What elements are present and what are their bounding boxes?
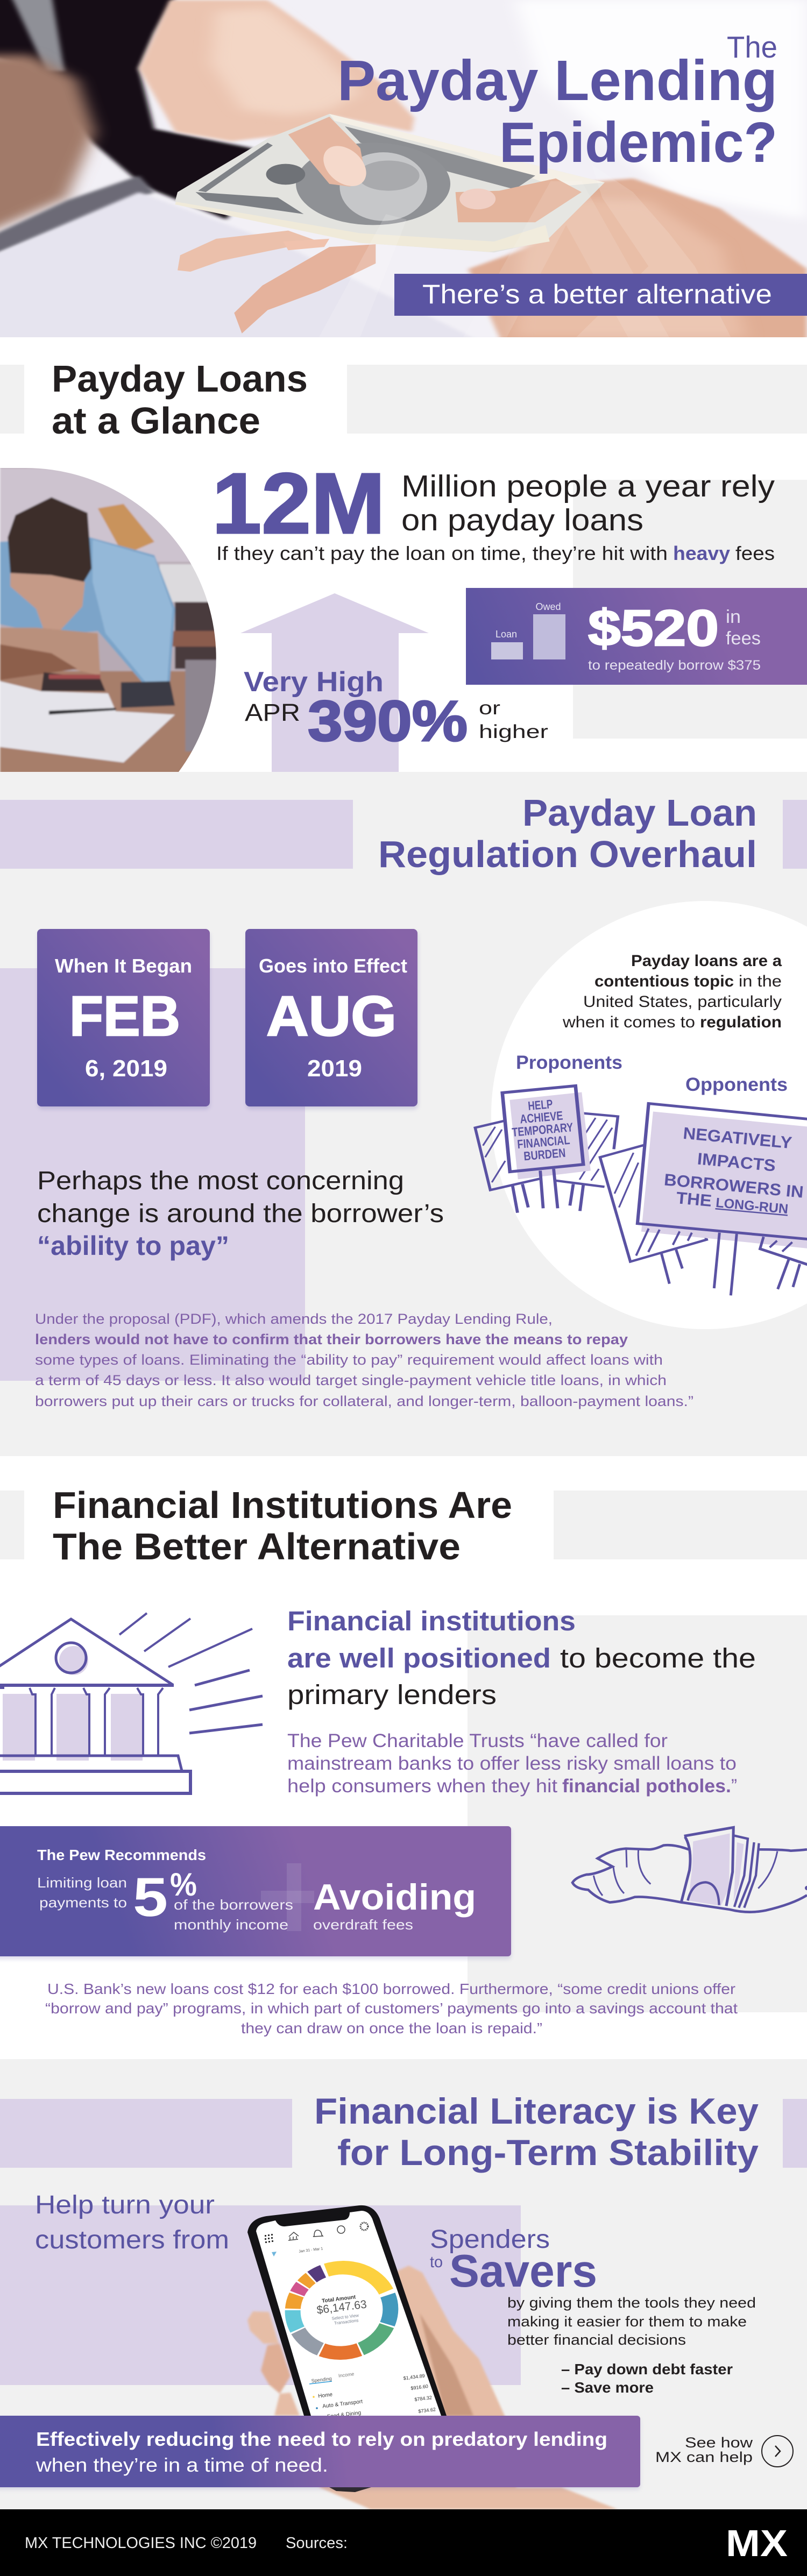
call to action: see how mx can help <box>655 2435 793 2467</box>
illustration: opponents signs: THE <box>676 1188 712 1210</box>
heading: financial literacy <box>0 2091 807 2173</box>
panel: $520 fees: in <box>726 607 741 627</box>
text: contentious topic: when it comes to <box>562 1013 695 1031</box>
illustration: opponents signs: IMPACTS <box>697 1149 776 1175</box>
text: credit unions paragraph: they can draw on once the loan is repaid.” <box>241 2020 542 2036</box>
text: contentious topic: contentious topic <box>594 973 734 990</box>
card: goes into effect: AUG <box>266 985 397 1048</box>
card: pew recommends: 5 <box>133 1867 168 1928</box>
text: well positioned: Financial institutions <box>287 1606 576 1636</box>
image: hand holding phone: Food & Dining <box>327 2410 362 2420</box>
text: pew trusts quote: help consumers when they hit <box>287 1776 557 1797</box>
gray backing panel <box>468 1615 807 2012</box>
panel: $520 fees: to repeatedly borrow $375 <box>588 658 761 673</box>
card: when it began: When It Began <box>55 955 192 977</box>
card: goes into effect: Goes into Effect <box>259 955 407 977</box>
heading: financial institutions: Financial Institutions Are <box>53 1484 512 1526</box>
image: hand holding phone: Income <box>338 2371 355 2379</box>
text: well positioned: are well positioned <box>287 1643 551 1673</box>
stat: APR 390%: or <box>479 698 500 719</box>
card: goes into effect: 2019 <box>307 1055 362 1082</box>
text: contentious topic <box>562 952 782 1031</box>
image: hand holding phone: Jan 31 - Mar 1 <box>299 2247 323 2254</box>
white circle <box>491 901 807 1329</box>
banner: reducing predatory lending: when they’re in a time of need. <box>36 2454 328 2476</box>
text: pew trusts quote <box>287 1730 737 1797</box>
card: pew recommends: of the borrowers <box>174 1897 293 1913</box>
card: when it began: 6, 2019 <box>85 1055 167 1082</box>
card: pew recommends: monthly income <box>174 1917 288 1933</box>
text: giving them the tools: making it easier for them to make <box>507 2314 747 2330</box>
hero subtitle banner <box>394 274 807 316</box>
text: spenders to savers: to <box>430 2253 443 2271</box>
heading: regulation overhaul: Regulation Overhaul <box>378 833 757 875</box>
heading: financial literacy: Financial Literacy is Key <box>314 2091 759 2132</box>
call to action: see how mx can help: MX can help <box>655 2449 753 2465</box>
stat: APR 390% <box>244 666 548 753</box>
list: benefits: – Save more <box>561 2379 654 2396</box>
illustration: proponents signs: FINANCIAL <box>516 1133 570 1151</box>
panel: $520 fees: Loan <box>495 629 517 640</box>
icon: hand with money <box>572 1827 807 1912</box>
text: help turn your customers: Help turn your <box>35 2191 215 2219</box>
hero title <box>337 30 777 174</box>
text: contentious topic: Payday loans are a <box>631 952 782 970</box>
hero photo: hands passing cash <box>0 0 807 348</box>
stat: APR 390%: Very High <box>244 666 384 698</box>
heading: payday loans at a glance: at a Glance <box>52 400 260 442</box>
image: hand holding phone: $6,147.63 <box>316 2298 367 2317</box>
text: spenders to savers: Savers <box>449 2246 597 2297</box>
text: ability to pay statement: change is around the borrower’s <box>37 1200 444 1228</box>
text: spenders to savers: Spenders <box>430 2225 550 2254</box>
banner: reducing predatory lending: Effectively reducing the need to rely on predatory lending <box>36 2428 607 2450</box>
text: giving them the tools: better financial decisions <box>507 2332 686 2348</box>
text: pew trusts quote: mainstream banks to offer less risky small loans to <box>287 1753 737 1774</box>
image: hand holding phone: $1,434.89 <box>403 2373 425 2381</box>
heading: regulation overhaul: Payday Loan <box>522 792 757 834</box>
image: hand holding phone: Home <box>318 2392 333 2400</box>
illustration: proponents signs: HELP <box>527 1097 553 1113</box>
text: ability to pay statement <box>37 1167 444 1261</box>
text: help turn your customers: customers from <box>35 2226 229 2254</box>
footer: MX TECHNOLOGIES INC ©2019 <box>25 2535 257 2552</box>
card: pew recommends: payments to <box>39 1894 127 1911</box>
lavender backing panel <box>0 2205 521 2385</box>
image: hand holding phone: $916.60 <box>410 2383 428 2391</box>
text: spenders to savers <box>430 2225 597 2297</box>
card: pew recommends: overdraft fees <box>313 1917 413 1933</box>
heading: financial institutions: The Better Alternative <box>53 1525 461 1567</box>
hero title: Payday Lending <box>337 49 777 112</box>
illustration: proponents signs: ACHIEVE <box>519 1109 563 1126</box>
text: credit unions paragraph: “borrow and pay” programs, in which part of customers’ payments go into a savings account that <box>45 2000 738 2017</box>
illustration: proponents signs <box>475 1086 618 1213</box>
illustration: opponents signs: BORROWERS IN <box>663 1170 804 1202</box>
heading: payday loans at a glance: Payday Loans <box>52 358 308 400</box>
text: help turn your customers <box>35 2191 229 2254</box>
text: well positioned: primary lenders <box>287 1679 497 1710</box>
illustration: opponents signs: LONG-RUN <box>715 1195 789 1217</box>
heading: payday loans at a glance <box>0 358 807 442</box>
stat: 12M people <box>212 455 775 551</box>
text: pew trusts quote: ” <box>731 1776 737 1797</box>
call to action: see how mx can help: See how <box>685 2435 753 2451</box>
text: well positioned <box>287 1606 756 1710</box>
illustration: proponents signs: BURDEN <box>523 1146 566 1163</box>
image: hand holding phone: $734.62 <box>418 2407 436 2414</box>
panel: $520 fees: fees <box>726 628 761 649</box>
text: pew trusts quote: The Pew Charitable Trusts “have called for <box>287 1730 668 1751</box>
card: pew recommends: Avoiding <box>313 1877 476 1918</box>
text: contentious topic: United States, particularly <box>583 993 782 1011</box>
stat: 12M people: Million people a year rely <box>401 469 775 503</box>
stat: APR 390%: 390% <box>308 689 468 753</box>
card: goes into effect <box>245 929 418 1109</box>
text: giving them the tools <box>507 2295 756 2348</box>
hero title: Epidemic? <box>499 111 777 174</box>
icon: bank building <box>0 1613 263 1793</box>
image: hand holding phone <box>247 2205 618 2509</box>
panel: $520 fees <box>466 588 807 685</box>
card: when it began: FEB <box>69 985 180 1048</box>
text: proposal paragraph: Under the proposal (PDF), which amends the 2017 Payday Lending Rule, <box>35 1311 553 1327</box>
stat: 12M people: 12M <box>212 455 385 551</box>
stat: APR 390%: APR <box>245 699 300 726</box>
text: heavy fees line: fees <box>735 542 775 564</box>
footer: MX <box>726 2522 788 2564</box>
text: proposal paragraph: lenders would not have to confirm that their borrowers have the means to repay <box>35 1331 628 1347</box>
illustration: proponents signs: TEMPORARY <box>511 1120 574 1139</box>
text: proposal paragraph <box>35 1311 693 1409</box>
list: benefits <box>561 2361 733 2396</box>
text: contentious topic: regulation <box>700 1013 782 1031</box>
text: contentious topic: in the <box>739 973 782 990</box>
illustration: opponents signs: NEGATIVELY <box>682 1124 793 1152</box>
label: opponents: Opponents <box>685 1074 788 1095</box>
panel: $520 fees: Owed <box>535 601 561 612</box>
heading: financial literacy: for Long-Term Stability <box>337 2132 759 2173</box>
image: hand holding phone: $784.32 <box>414 2395 432 2402</box>
hero title: The <box>727 30 777 65</box>
stat: 12M people: on payday loans <box>401 503 643 537</box>
text: credit unions paragraph <box>45 1981 738 2036</box>
photo: stressed man at desk <box>0 466 226 773</box>
gray backing panel <box>573 480 807 739</box>
heading: regulation overhaul <box>0 792 807 875</box>
image: hand holding phone: Auto & Transport <box>322 2398 363 2410</box>
card: pew recommends: The Pew Recommends <box>37 1847 206 1863</box>
card: pew recommends: Limiting loan <box>37 1875 127 1891</box>
label: proponents: Proponents <box>516 1052 622 1073</box>
text: heavy fees line: If they can’t pay the loan on time, they’re hit with <box>216 542 668 564</box>
heading: financial institutions <box>0 1484 807 1567</box>
card: when it began <box>37 929 210 1109</box>
text: heavy fees line: heavy <box>673 542 730 564</box>
image: hand holding phone: Spending <box>311 2376 332 2383</box>
lavender backing panel <box>0 968 305 1381</box>
panel: $520 fees: $520 <box>588 600 719 657</box>
list: benefits: – Pay down debt faster <box>561 2361 733 2378</box>
text: pew trusts quote: financial potholes. <box>562 1776 731 1797</box>
card: pew recommends: % <box>170 1867 197 1903</box>
text: ability to pay statement: “ability to pay” <box>37 1231 229 1261</box>
illustration: opponents signs <box>600 1104 807 1295</box>
text: proposal paragraph: a term of 45 days or less. It also would target single-payment vehicle title loans, in which <box>35 1372 667 1388</box>
hero subtitle banner: There’s a better alternative <box>422 279 772 309</box>
image: hand holding phone: Total Amount <box>322 2294 356 2304</box>
icon: up arrow <box>240 593 429 772</box>
text: proposal paragraph: borrowers put up their cars or trucks for collateral, and longer-term, balloon-payment loans.” <box>35 1393 693 1409</box>
text: ability to pay statement: Perhaps the most concerning <box>37 1167 404 1195</box>
footer <box>0 2509 807 2576</box>
stat: APR 390%: higher <box>479 721 548 742</box>
text: credit unions paragraph: U.S. Bank’s new loans cost $12 for each $100 borrowed. Furthermore, “some credit unions offer <box>47 1981 735 1997</box>
banner: reducing predatory lending <box>0 2416 640 2489</box>
text: proposal paragraph: some types of loans. Eliminating the “ability to pay” requirement would affect loans with <box>35 1352 663 1368</box>
footer: Sources: <box>286 2535 348 2552</box>
image: hand holding phone: Transactions <box>334 2318 359 2326</box>
card: pew recommends <box>0 1826 511 1959</box>
text: giving them the tools: by giving them the tools they need <box>507 2295 756 2311</box>
text: well positioned: to become the <box>560 1643 756 1673</box>
image: hand holding phone: Select to View <box>331 2313 359 2321</box>
